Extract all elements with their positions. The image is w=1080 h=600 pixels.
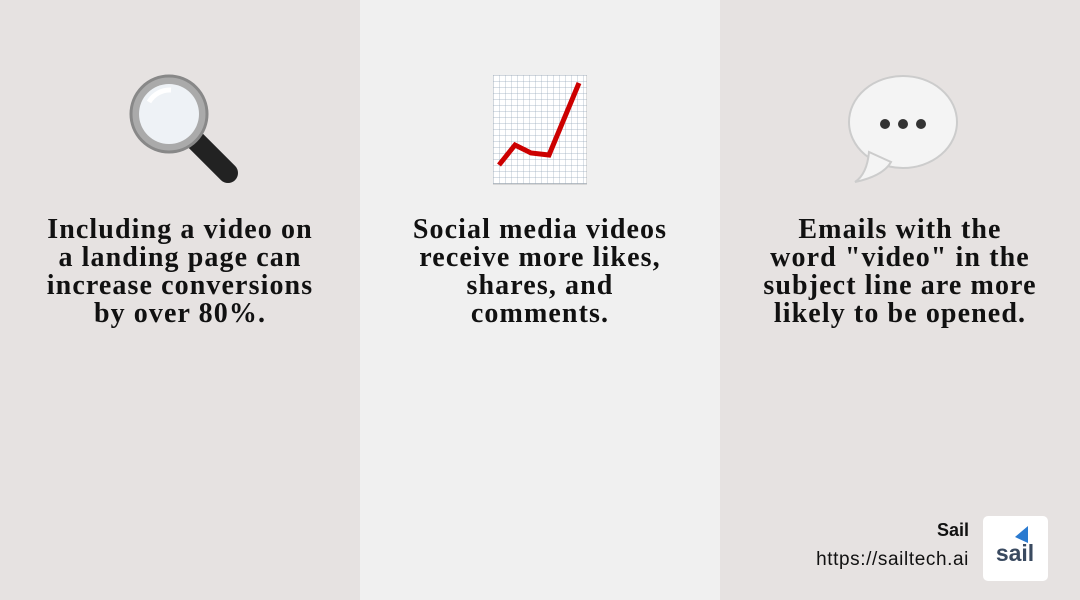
heading: right: Emails with the [798,214,1002,245]
heading: right: likely to be opened. [774,298,1026,329]
heading: left: increase conversions [47,270,313,301]
heading: right [763,214,1037,329]
heading: left: by over 80%. [94,298,266,329]
heading: left [47,214,313,329]
panel: middle [360,0,720,600]
heading: middle [413,214,667,329]
heading: middle: shares, and [467,270,613,301]
brand text [816,520,969,570]
heading: middle: Social media videos [413,214,667,245]
logo [983,516,1048,581]
logo: sail [996,540,1034,566]
heading: right: subject line are more [763,270,1037,301]
heading: middle: receive more likes, [419,242,661,273]
heading: left: a landing page can [58,242,302,273]
panel: left [0,0,360,600]
icon: chart [493,75,587,184]
brand text: https://sailtech.ai [816,549,969,570]
icon: magnifier [130,74,238,183]
heading: right: word "video" in the [770,242,1030,273]
brand text: Sail [937,520,969,540]
heading: middle: comments. [471,298,609,329]
panel: right [720,0,1080,600]
icon: speech bubble [848,75,958,183]
heading: left: Including a video on [47,214,313,245]
